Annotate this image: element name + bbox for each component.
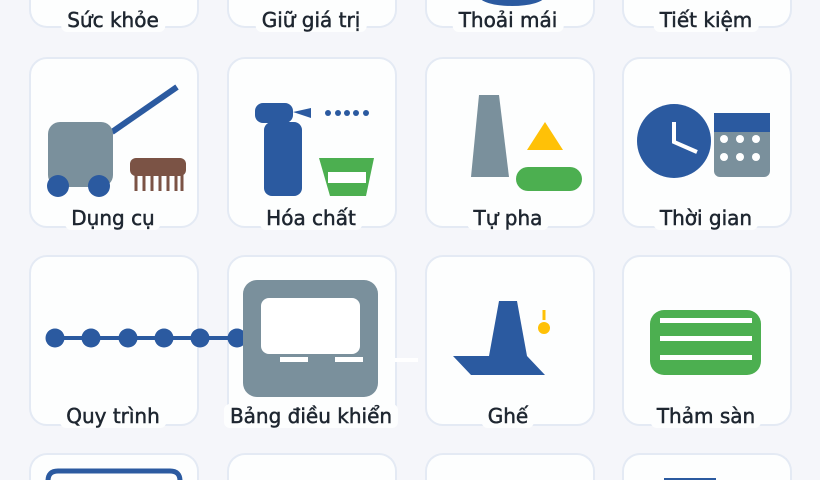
card: row 4 col 4 <box>622 453 792 480</box>
icon: self mix <box>471 95 582 191</box>
label: Hóa chất: Hóa chất <box>266 206 356 230</box>
card: Thời gian <box>622 57 792 228</box>
card: Quy trình <box>29 255 199 426</box>
card: row 4 col 2 <box>227 453 397 480</box>
label: Bảng điều khiển: Bảng điều khiển <box>230 404 392 428</box>
label: Thời gian: Thời gian <box>660 206 752 230</box>
icon: process <box>46 328 246 348</box>
icon: tools <box>47 87 186 197</box>
icon: chair <box>453 301 550 375</box>
icon: chemicals <box>255 103 374 196</box>
card: Thoải mái <box>425 0 595 28</box>
card: Thảm sàn <box>622 255 792 426</box>
card: Sức khỏe <box>29 0 199 28</box>
card: Ghế <box>425 255 595 426</box>
card: Dụng cụ <box>29 57 199 228</box>
icon: comfort partial <box>479 0 545 6</box>
card: Giữ giá trị <box>227 0 397 28</box>
icon: control panel <box>243 280 418 397</box>
card: row 4 col 3 <box>425 453 595 480</box>
label: Ghế: Ghế <box>488 404 528 428</box>
card: Tự pha <box>425 57 595 228</box>
card: Bảng điều khiển <box>227 255 397 426</box>
label: Tự pha: Tự pha <box>474 206 542 230</box>
card: Tiết kiệm <box>622 0 792 28</box>
label: Thảm sàn: Thảm sàn <box>657 404 755 428</box>
label: Dụng cụ: Dụng cụ <box>71 206 155 230</box>
label: Giữ giá trị: Giữ giá trị <box>262 8 360 32</box>
icon: row4 partials <box>48 471 716 480</box>
card: Hóa chất <box>227 57 397 228</box>
label: Thoải mái: Thoải mái <box>459 8 557 32</box>
icon: carpet <box>650 310 761 375</box>
label: Quy trình: Quy trình <box>66 404 160 428</box>
card: row 4 col 1 <box>29 453 199 480</box>
label: Tiết kiệm: Tiết kiệm <box>660 8 752 32</box>
icon: time <box>637 104 770 178</box>
label: Sức khỏe: Sức khỏe <box>67 8 159 32</box>
